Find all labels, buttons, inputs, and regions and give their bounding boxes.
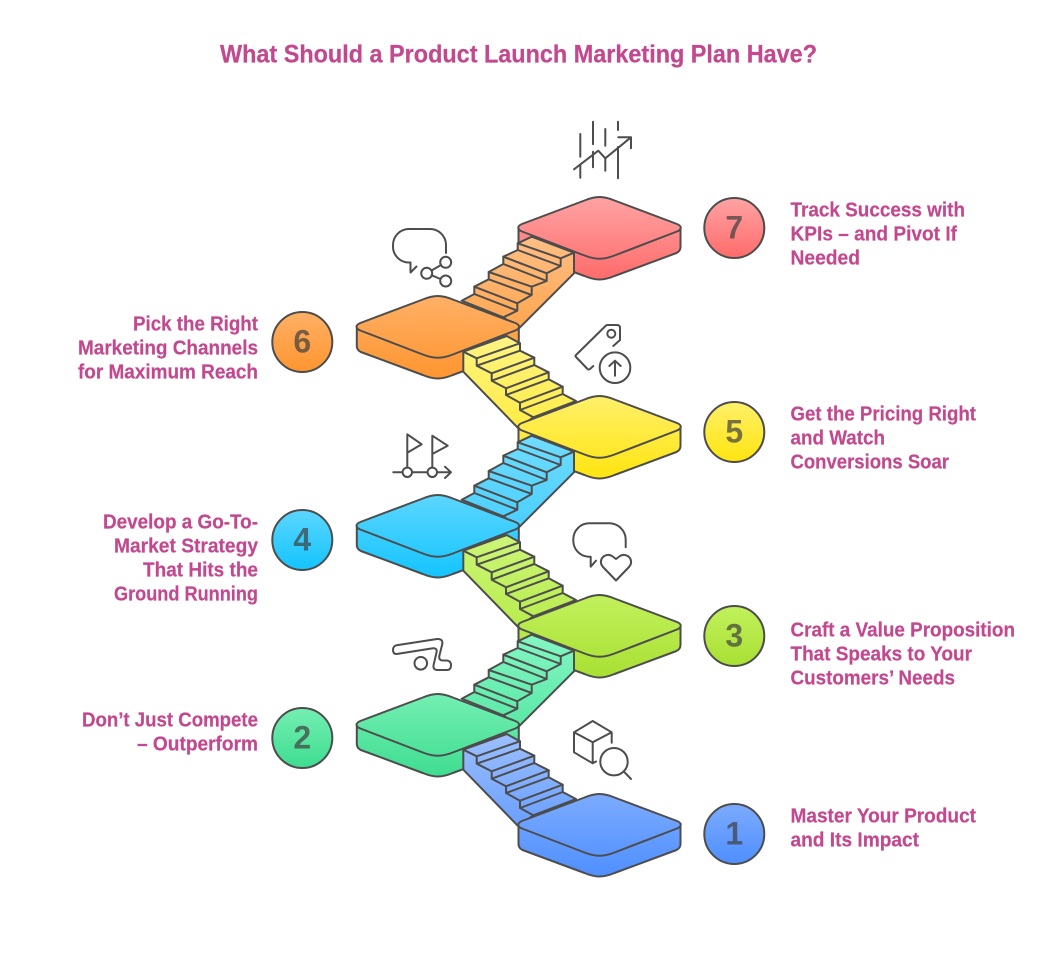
- text: step 3: [790, 620, 1015, 690]
- staircase diagram: [357, 197, 681, 876]
- text: step 6: Marketing Channels: [78, 338, 258, 360]
- badge 3: 3: [725, 618, 743, 654]
- step 3 platform with green stairs: [462, 595, 681, 726]
- text: step 7: Track Success with: [790, 200, 965, 222]
- text: step 5: Get the Pricing Right: [790, 404, 976, 426]
- text: step 4: Ground Running: [114, 584, 258, 606]
- icon: speech bubble with share nodes: [393, 229, 451, 286]
- badge 3: [704, 606, 764, 666]
- step 4 platform with lime stairs: [357, 495, 576, 627]
- step 1 platform: [518, 794, 681, 876]
- text: step 1: [790, 806, 976, 852]
- step 6 platform with yellow stairs: [357, 296, 576, 428]
- badge 2: 2: [293, 720, 311, 756]
- text: step 4: Develop a Go-To-: [103, 512, 258, 534]
- badge 1: [704, 804, 764, 864]
- badge 7: [704, 198, 764, 258]
- text: step 1: and Its Impact: [790, 830, 919, 852]
- text: step 4: [103, 512, 259, 606]
- text: step 2: – Outperform: [137, 734, 258, 756]
- text: step 3: Craft a Value Proposition: [790, 620, 1015, 642]
- text: step 2: Don’t Just Compete: [82, 710, 258, 732]
- text: step 3: Customers’ Needs: [790, 668, 955, 690]
- step 2 platform with blue stairs: [357, 694, 576, 826]
- badge 2: [272, 708, 332, 768]
- badge 5: [704, 402, 764, 462]
- badge 6: 6: [293, 324, 311, 360]
- text: step 7: Needed: [790, 248, 860, 270]
- text: step 7: [790, 200, 965, 270]
- text: step 5: and Watch: [790, 428, 885, 450]
- text: step 6: [78, 314, 258, 384]
- badge 4: [272, 510, 332, 570]
- badge 1: 1: [725, 816, 743, 852]
- text: step 2: [82, 710, 258, 756]
- text: step 1: Master Your Product: [790, 806, 976, 828]
- badge 7: 7: [725, 210, 743, 246]
- text: step 6: Pick the Right: [133, 314, 258, 336]
- badge 6: [272, 312, 332, 372]
- step 7 platform with orange stairs: [462, 197, 681, 328]
- badge 5: 5: [725, 414, 743, 450]
- icon: competition bar and ball: [393, 639, 451, 670]
- text: step 5: [790, 404, 976, 474]
- title: What Should a Product Launch Marketing Plan Have?: [220, 41, 817, 69]
- text: step 4: Market Strategy: [114, 536, 259, 558]
- text: step 4: That Hits the: [143, 560, 258, 582]
- badge 4: 4: [293, 522, 311, 558]
- text: step 7: KPIs – and Pivot If: [790, 224, 957, 246]
- icon: speech bubble with heart: [573, 523, 631, 580]
- icon: price tag with up arrow: [576, 325, 630, 383]
- text: step 6: for Maximum Reach: [78, 362, 258, 384]
- icon: flags on a timeline: [393, 434, 451, 478]
- icon: growth chart: [574, 122, 631, 178]
- text: step 5: Conversions Soar: [790, 452, 949, 474]
- icon: box with magnifier: [574, 721, 631, 779]
- text: step 3: That Speaks to Your: [790, 644, 972, 666]
- step 5 platform with cyan stairs: [462, 396, 681, 527]
